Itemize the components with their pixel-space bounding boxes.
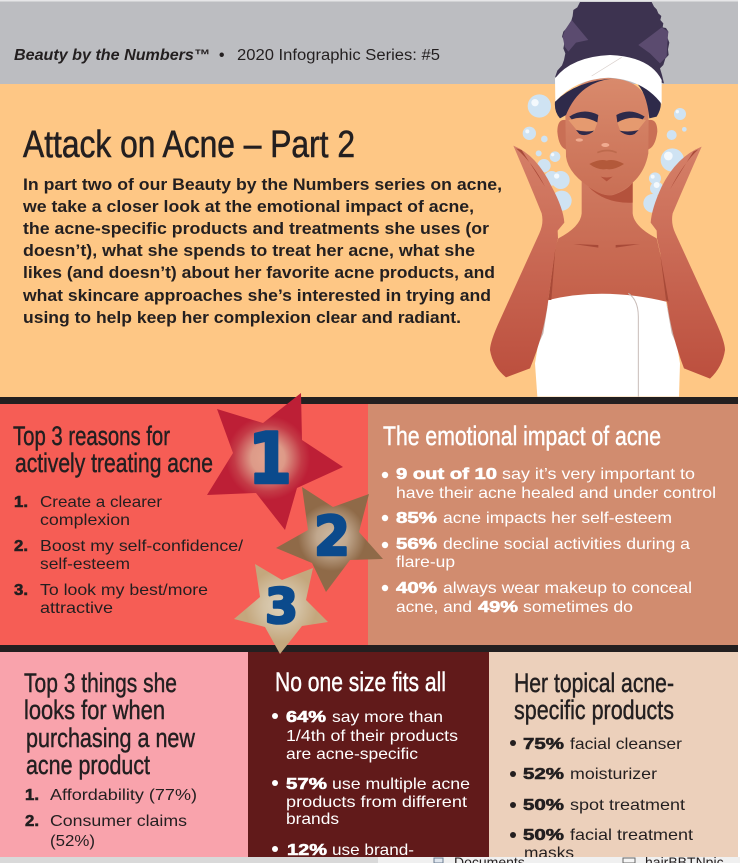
- list: emotional impact statistics: acne impacts her self-esteem: [443, 510, 672, 527]
- arms and hands: [490, 146, 564, 377]
- icon: soap bubbles: [523, 94, 687, 213]
- list: emotional impact statistics: always wear makeup to conceal: [443, 580, 692, 597]
- list: purchase factors: Affordability (77%): [50, 787, 197, 804]
- intro text block: using to help keep her complexion clear and radiant.: [23, 309, 461, 327]
- panel: top 3 reasons: [0, 404, 368, 645]
- heading: topical products: specific products: [514, 695, 674, 725]
- list: topical products: spot treatment: [570, 797, 686, 814]
- list: reasons: 2.: [14, 538, 28, 555]
- list: emotional impact statistics: say it’s very important to: [502, 466, 695, 483]
- list: product use statistics: [272, 709, 470, 859]
- intro text block: the acne-specific products and treatments she uses (or: [23, 220, 490, 238]
- heading: top 3 reasons: Top 3 reasons for: [13, 421, 170, 451]
- list: emotional impact statistics: 56%: [396, 536, 437, 553]
- list: product use statistics: 12%: [287, 842, 327, 859]
- header line: [14, 47, 440, 64]
- list: topical products: 50%: [523, 797, 564, 814]
- intro text block: we take a closer look at the emotional impact of acne,: [22, 198, 474, 216]
- list: purchase factors: 2.: [25, 813, 39, 830]
- header line: Beauty by the Numbers™: [14, 47, 210, 64]
- icon: star 3: 3: [265, 579, 298, 635]
- page background bands: [0, 0, 738, 652]
- intro text block: [22, 176, 502, 327]
- icon: star 2: [276, 487, 383, 592]
- list: purchase factors: [25, 787, 197, 850]
- list: product use statistics: use brand-: [332, 842, 414, 859]
- intro text block: likes (and doesn’t) about her favorite acne products, and: [23, 264, 495, 282]
- list: product use statistics: products from different: [286, 794, 468, 811]
- heading: top 3 things: Top 3 things she: [24, 668, 177, 698]
- list: product use statistics: use multiple acne: [332, 776, 470, 793]
- ears: [557, 120, 657, 150]
- list: emotional impact statistics: 9 out of 10: [396, 466, 497, 483]
- heading: top 3 things: acne product: [26, 750, 150, 780]
- list: purchase factors: (52%): [50, 833, 95, 850]
- list: emotional impact statistics: acne, and: [396, 599, 472, 616]
- collarbones: [573, 244, 640, 248]
- list: topical products: moisturizer: [570, 766, 658, 783]
- list: topical products: facial cleanser: [570, 736, 683, 753]
- list: topical products: facial treatment: [570, 827, 694, 844]
- list: product use statistics: 57%: [286, 776, 327, 793]
- screen capture taskbar: [0, 854, 740, 863]
- list: purchase factors: Consumer claims: [50, 813, 187, 830]
- illustration: woman washing face: [490, 2, 725, 397]
- list: emotional impact statistics: decline social activities during a: [443, 536, 690, 553]
- list: emotional impact statistics: 85%: [396, 510, 437, 527]
- list: reasons: To look my best/more: [40, 582, 208, 599]
- intro text block: doesn’t), what she spends to treat her acne, what she: [23, 242, 475, 260]
- list: product use statistics: say more than: [332, 709, 443, 726]
- list: product use statistics: 64%: [286, 709, 326, 726]
- list: topical products: [510, 736, 694, 862]
- list: product use statistics: brands: [286, 811, 339, 828]
- list: product use statistics: 1/4th of their products: [286, 728, 458, 745]
- panel: no one size fits all: [248, 652, 489, 859]
- list: topical products: masks: [524, 845, 574, 862]
- list: emotional impact statistics: have their acne healed and under control: [396, 485, 716, 502]
- towel: [535, 294, 680, 397]
- list: purchase factors: 1.: [25, 787, 39, 804]
- list: emotional impact statistics: flare-up: [396, 554, 455, 571]
- heading: top 3 things: [24, 668, 195, 780]
- neck shadow: [588, 183, 633, 203]
- heading: emotional impact: The emotional impact of acne: [383, 421, 661, 451]
- heading: top 3 things: looks for when: [24, 695, 165, 725]
- list: topical products: 50%: [523, 827, 564, 844]
- list: emotional impact statistics: 40%: [396, 580, 437, 597]
- face: [565, 78, 649, 195]
- list: reasons: complexion: [40, 512, 130, 529]
- facial features: [568, 112, 646, 181]
- heading: top 3 reasons: actively treating acne: [15, 448, 213, 478]
- intro text block: In part two of our Beauty by the Numbers series on acne,: [23, 176, 502, 194]
- list: reasons: [14, 494, 244, 617]
- list: reasons: Boost my self-confidence/: [40, 538, 244, 555]
- list: topical products: 52%: [523, 766, 564, 783]
- headband: [555, 55, 662, 104]
- heading: topical products: Her topical acne-: [514, 668, 674, 698]
- list: reasons: attractive: [40, 600, 113, 617]
- heading: topical products: [514, 668, 674, 725]
- hair sides: [555, 78, 661, 118]
- panel: top 3 things: [0, 652, 248, 858]
- list: emotional impact statistics: 49%: [478, 599, 518, 616]
- icon: star 1: 1: [248, 418, 292, 500]
- header line: 2020 Infographic Series: #5: [237, 47, 440, 64]
- title: Attack on Acne – Part 2: [23, 124, 355, 166]
- hair bun: [555, 2, 669, 83]
- icon: star 3: [234, 564, 328, 654]
- icon: star 1: [207, 393, 343, 530]
- heading: no one size fits all: No one size fits all: [275, 667, 446, 697]
- list: emotional impact statistics: sometimes do: [523, 599, 633, 616]
- list: reasons: Create a clearer: [40, 494, 163, 511]
- list: reasons: self-esteem: [40, 556, 130, 573]
- list: emotional impact statistics: [382, 466, 716, 616]
- panel: topical products: [489, 652, 738, 862]
- list: reasons: 3.: [14, 582, 28, 599]
- list: topical products: 75%: [523, 736, 564, 753]
- header line: •: [219, 47, 224, 64]
- neck and torso: [548, 177, 668, 302]
- intro text block: what skincare approaches she’s interested in trying and: [22, 287, 491, 305]
- heading: top 3 reasons: [13, 421, 213, 478]
- list: product use statistics: are acne-specific: [286, 746, 418, 763]
- panel: emotional impact: [368, 404, 738, 645]
- icon: star 2: 2: [314, 505, 350, 568]
- heading: top 3 things: purchasing a new: [26, 723, 195, 753]
- list: reasons: 1.: [14, 494, 28, 511]
